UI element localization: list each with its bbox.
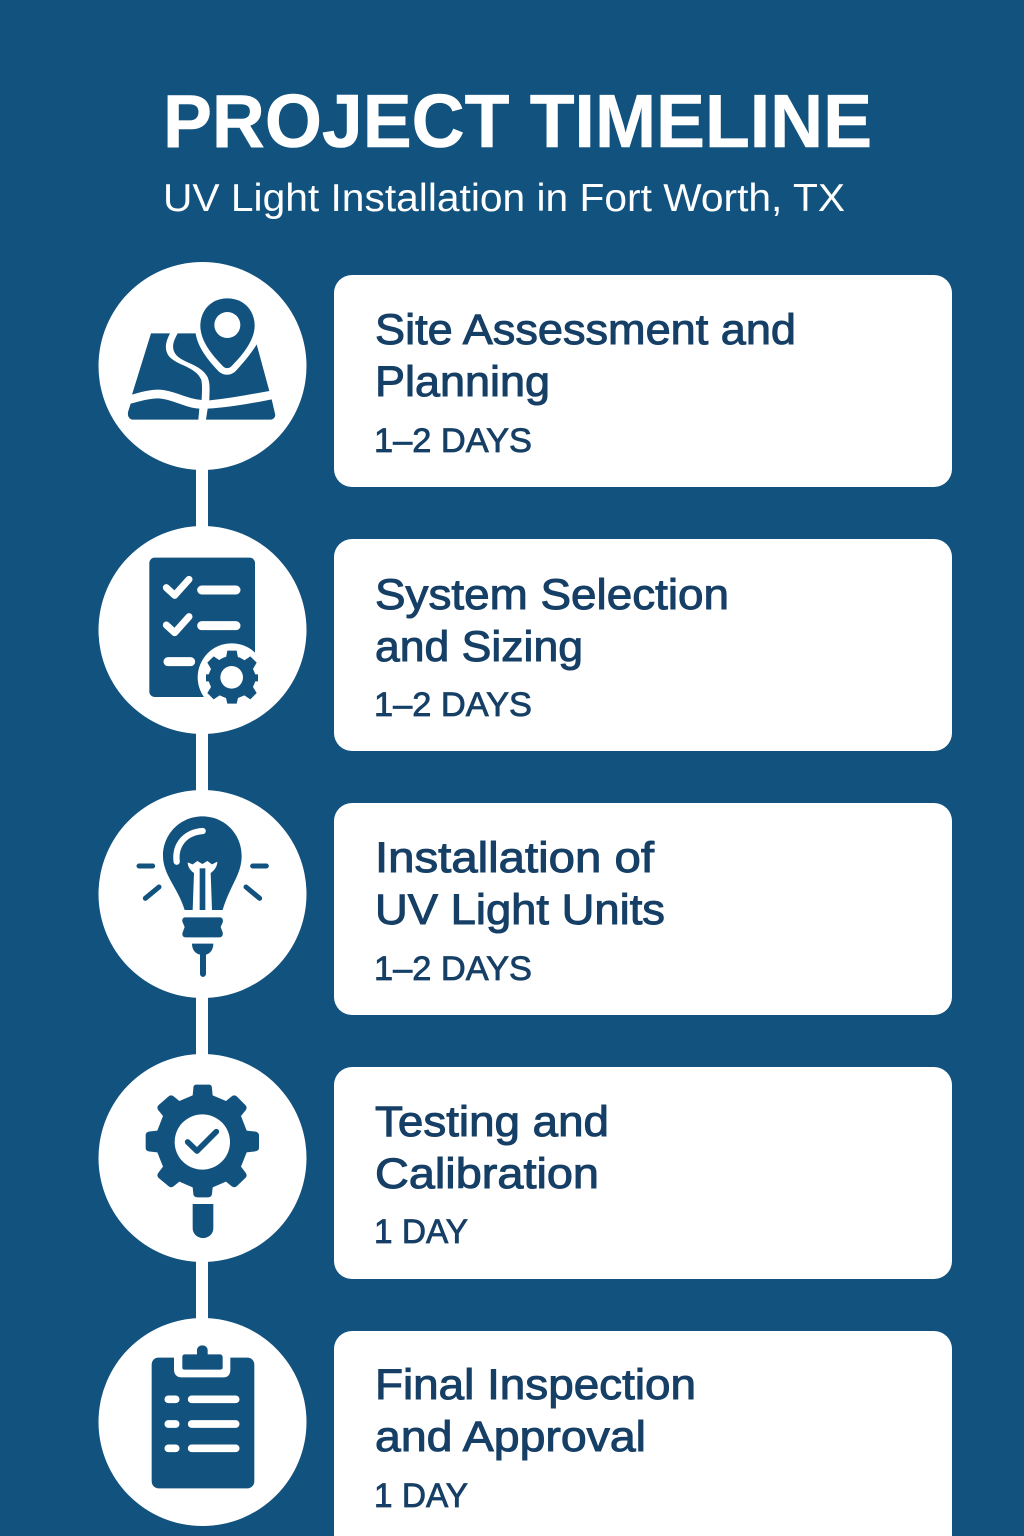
step 2 duration: 1–2 DAYS [374,686,532,724]
step 5 duration: 1 DAY [374,1477,468,1515]
step 4 heading line 2: Calibration [375,1150,599,1198]
title: PROJECT TIMELINE [163,79,872,163]
step 4 duration: 1 DAY [374,1213,468,1251]
step 3 heading line 2: UV Light Units [375,886,665,934]
step 5 heading line 2: and Approval [375,1413,646,1461]
card: final inspection [334,1331,952,1536]
card: testing [334,1067,952,1279]
card: installation [334,803,952,1015]
step 4 icon: gear with check and handle [98,1054,306,1262]
step 3 heading: Installation of [375,834,655,882]
step 5 icon: clipboard [98,1318,306,1526]
subtitle: UV Light Installation in Fort Worth, TX [163,177,845,220]
card: site assessment [334,275,952,487]
step 2 heading line 2: and Sizing [375,623,583,671]
step 3 icon: light bulb [98,790,306,998]
step 5 heading: Final Inspection [375,1361,696,1409]
step 1 heading: Site Assessment and [375,306,796,354]
step 4 heading: Testing and [375,1098,609,1146]
step 3 duration: 1–2 DAYS [374,950,532,988]
step 1 heading line 2: Planning [375,358,550,406]
card: system selection [334,539,952,751]
step 2 heading: System Selection [375,571,729,619]
step 1 duration: 1–2 DAYS [374,422,532,460]
timeline connector [196,460,208,1332]
step 2 icon: checklist with gear [98,526,306,734]
step 1 icon: map with location pin [98,262,306,470]
